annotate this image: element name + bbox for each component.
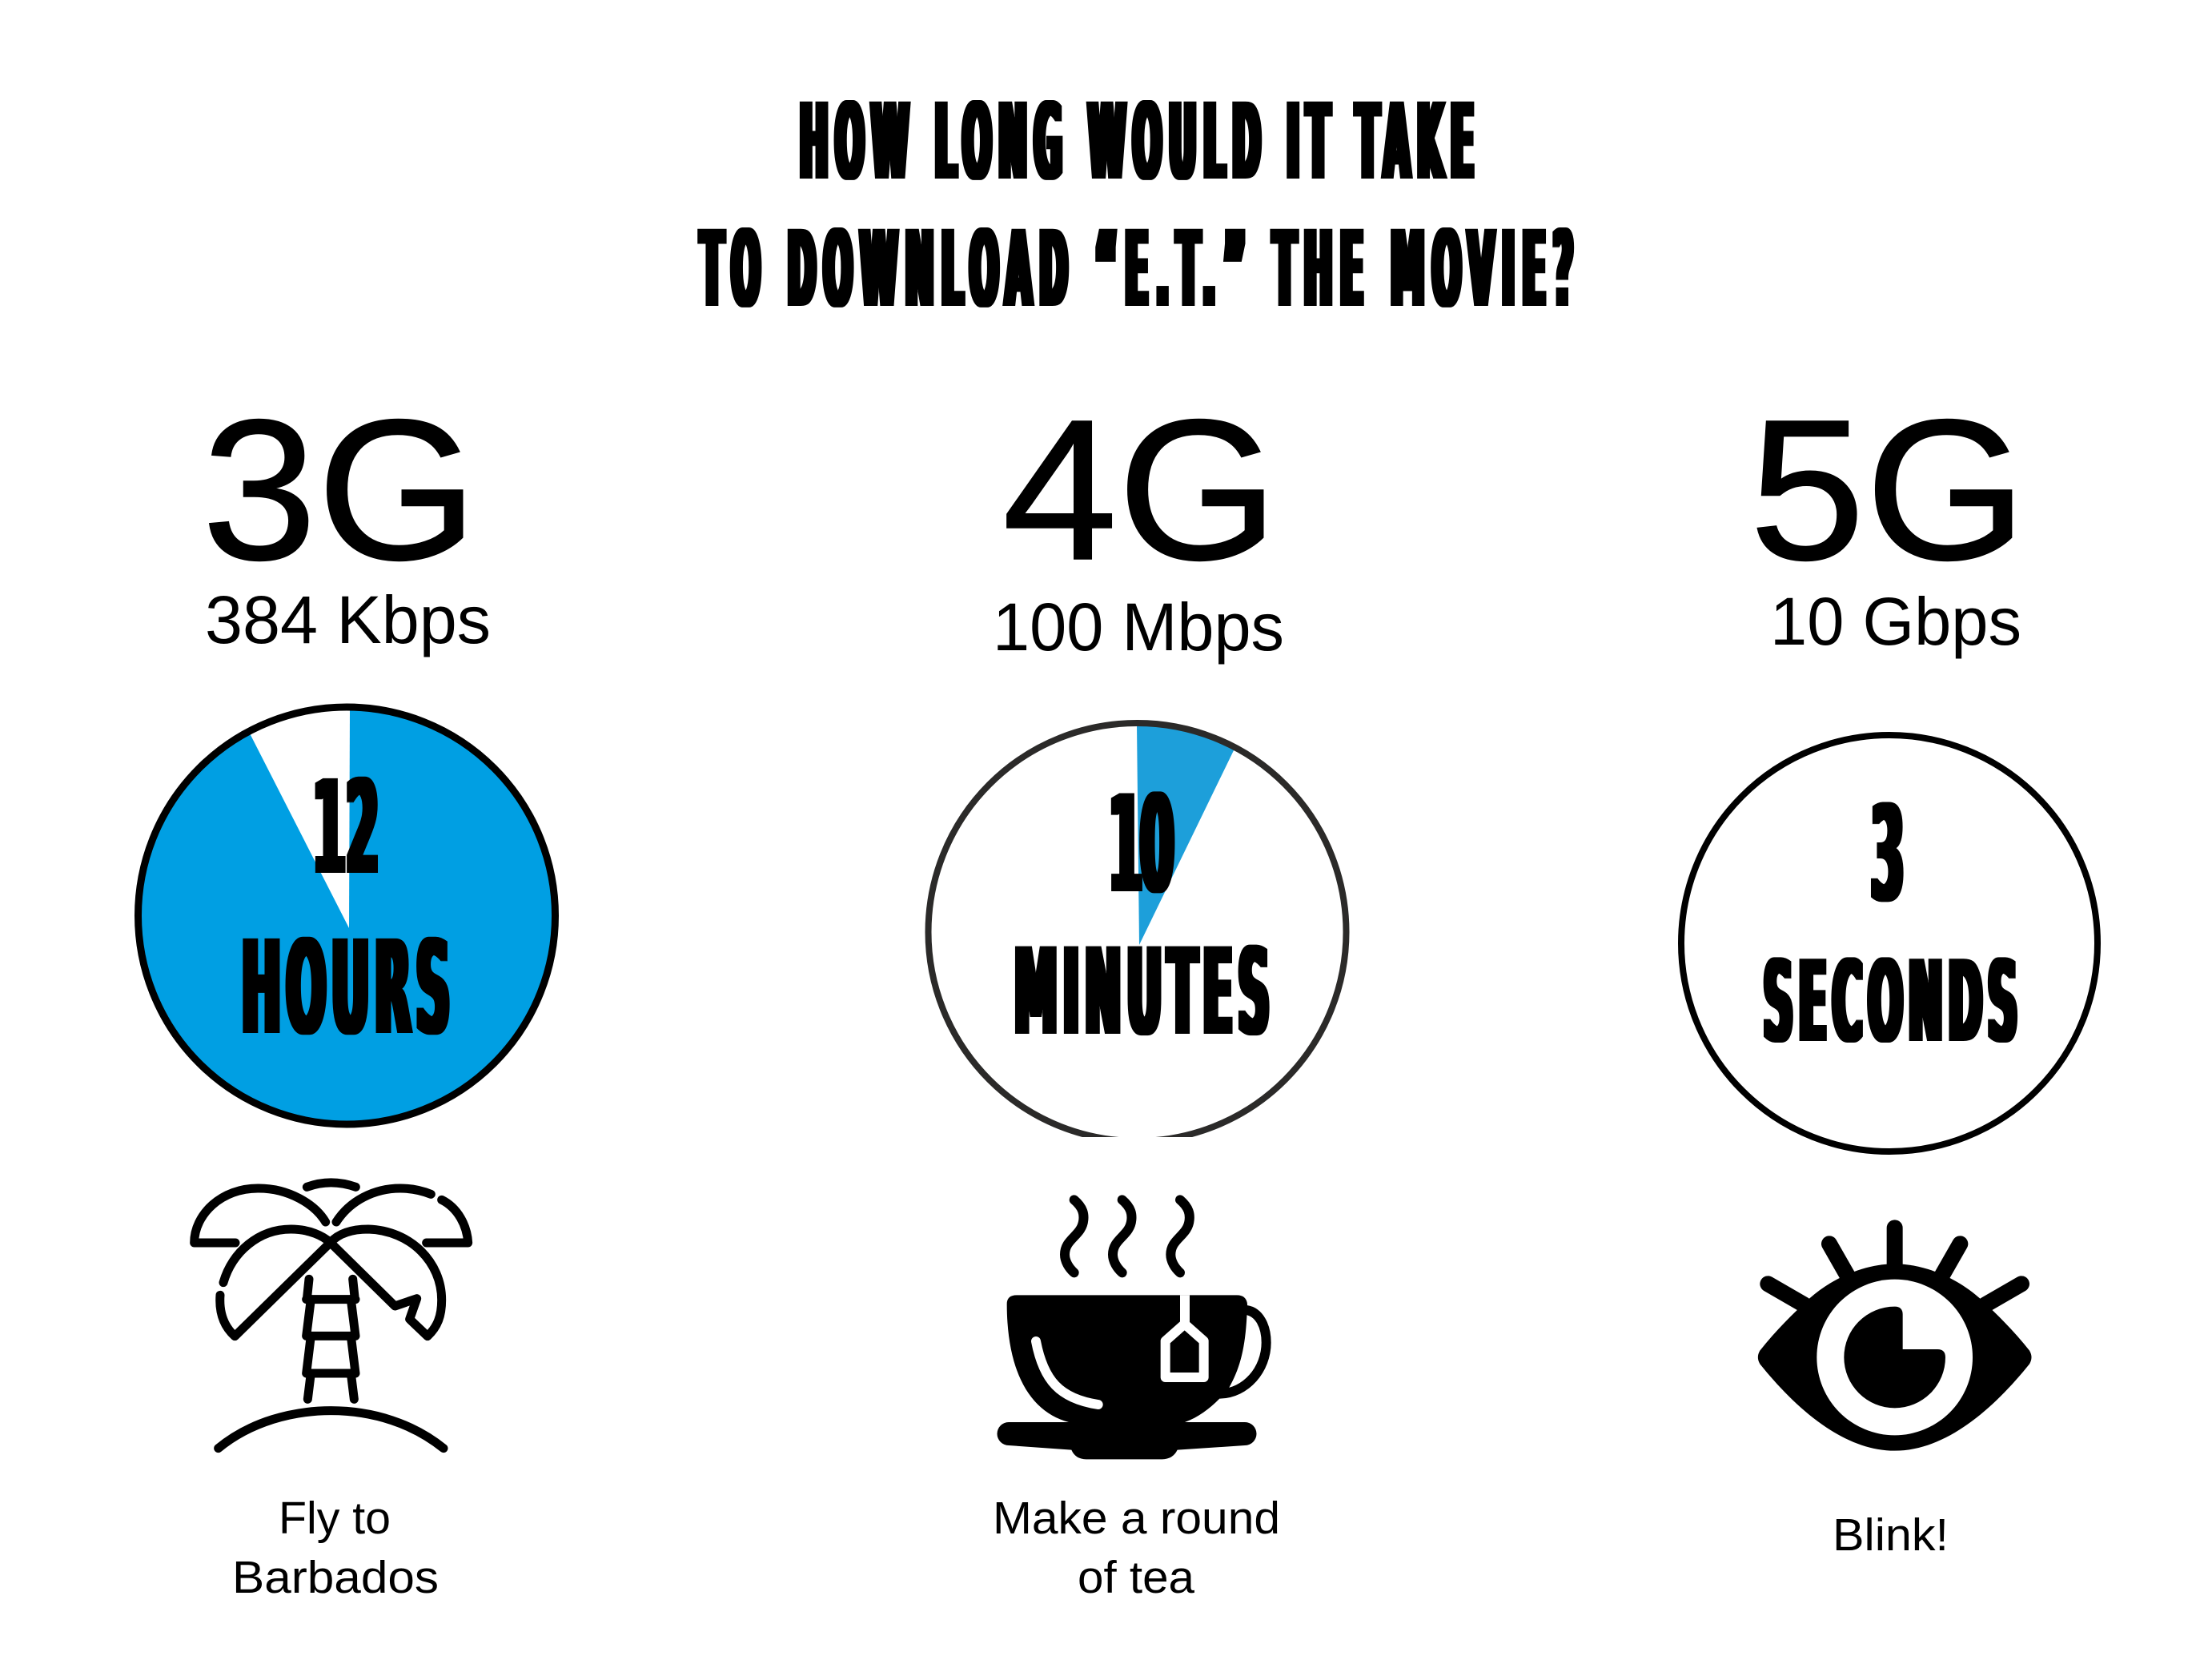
- caption: blink: Blink!: [1833, 1509, 1949, 1561]
- highlight: [1036, 1341, 1098, 1405]
- pie timer: 10 minutes: [929, 723, 1347, 1141]
- speed: 384 Kbps: 384 Kbps: [205, 582, 491, 657]
- icon: eye: [1758, 1228, 2031, 1451]
- icon: cup of tea: [997, 1200, 1267, 1459]
- cup and saucer: [997, 1295, 1256, 1459]
- caption: fly to Barbados: Fly to: [279, 1493, 391, 1544]
- iris: [1817, 1280, 1973, 1435]
- eyelashes: [1768, 1228, 2021, 1304]
- title line 2: TO DOWNLOAD “E.T.” THE MOVIE?: [701, 209, 1573, 332]
- heading: 3G: 3G: [202, 378, 478, 601]
- time unit: minutes: MINUTES: [1014, 922, 1270, 1063]
- time value: 12: 12: [313, 753, 379, 904]
- panel: 4G: [929, 378, 1347, 1603]
- time value: 3: 3: [1871, 778, 1904, 932]
- steam: [1065, 1200, 1190, 1272]
- caption: fly to Barbados: [232, 1493, 439, 1603]
- heading: 5G: 5G: [1749, 378, 2027, 601]
- caption: make a round of tea: of tea: [1078, 1552, 1194, 1603]
- panel: 3G: [138, 378, 556, 1603]
- time unit: seconds: SECONDS: [1764, 937, 2017, 1067]
- icon: palm tree: [195, 1183, 468, 1449]
- handle: [1219, 1310, 1267, 1394]
- caption: fly to Barbados: Barbados: [232, 1552, 439, 1603]
- time unit: hours: HOURS: [242, 913, 450, 1064]
- title line 1: HOW LONG WOULD IT TAKE: [800, 82, 1474, 204]
- pie timer: 12 hours: [138, 707, 556, 1124]
- time value: 10: 10: [1109, 766, 1174, 923]
- heading: 4G: 4G: [1002, 378, 1279, 601]
- caption: make a round of tea: Make a round: [993, 1493, 1280, 1544]
- caption: make a round of tea: [993, 1493, 1280, 1603]
- pupil: [1844, 1307, 1945, 1408]
- speed: 100 Mbps: 100 Mbps: [993, 589, 1284, 665]
- pie timer: 3 seconds: [1681, 735, 2098, 1152]
- eye shape: [1758, 1264, 2031, 1451]
- title: [701, 82, 1573, 332]
- tea bag tag: [1170, 1295, 1199, 1324]
- panel: 5G: [1681, 378, 2098, 1561]
- speed: 10 Gbps: 10 Gbps: [1770, 584, 2021, 659]
